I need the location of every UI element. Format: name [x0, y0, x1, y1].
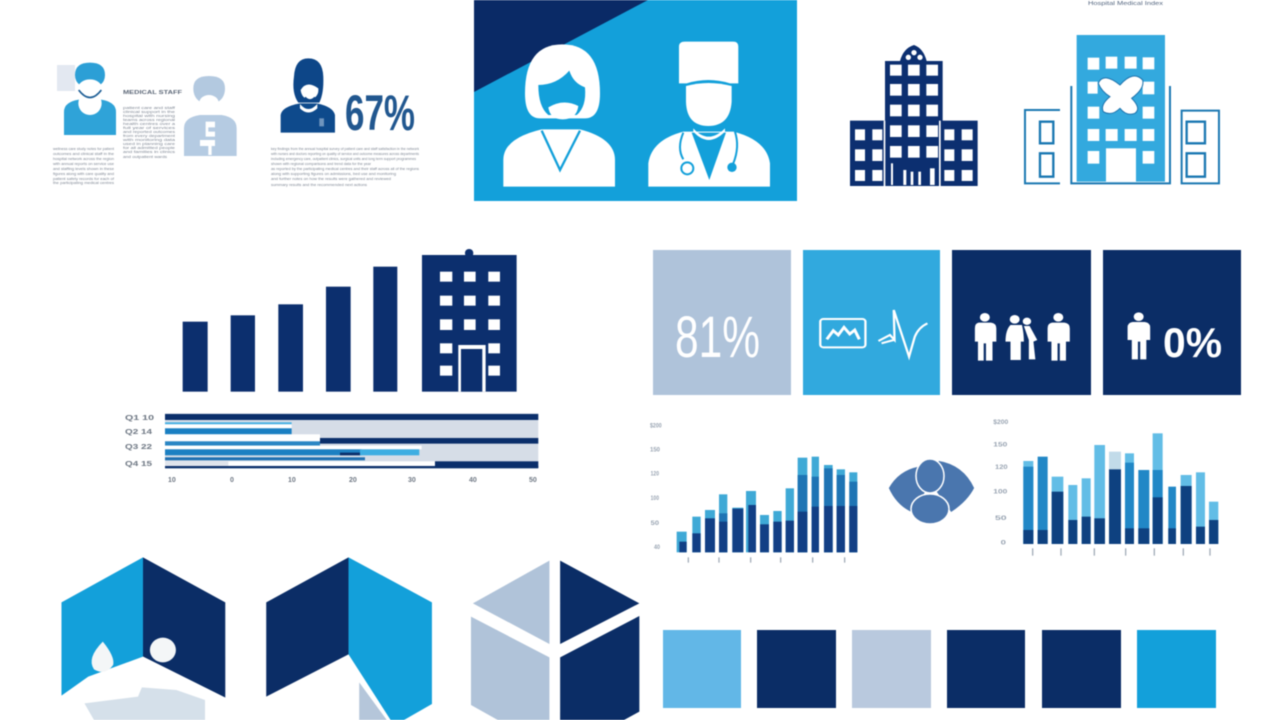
text block: middle paragraph: and reported outcomes [123, 129, 175, 134]
bar chart: left stacked columns: 150 [650, 446, 660, 453]
caption: top right tiny text: Hospital Medical Index [1088, 1, 1164, 7]
axis labels: horizontal bar scale: 40 [469, 477, 477, 484]
panel: 81 percent tile: 81% [675, 305, 760, 370]
icon: light blue clinician [184, 76, 237, 156]
bar chart: left stacked columns [650, 422, 857, 563]
icon: pulse star [878, 310, 927, 357]
axis labels: horizontal bar scale: 10 [168, 477, 176, 484]
axis labels: horizontal bar categories: Q3 22 [125, 444, 152, 451]
text block: left paragraph: hospital network across the region [53, 156, 114, 161]
text block: left paragraph: figures along with care quality and [53, 171, 114, 176]
icon: sky blue hospital with cross [1025, 35, 1219, 183]
text block: left paragraph: patient safety records for each of [53, 176, 115, 181]
text block: right paragraph: summary results and the recommended next actions [271, 182, 367, 187]
text block: right paragraph: shown with regional comparisons and trend data for the year [271, 161, 372, 166]
bar chart: right stacked columns: $200 [993, 419, 1009, 426]
series: dark base [679, 505, 857, 552]
heading: small section title: MEDICAL STAFF [123, 90, 183, 96]
panel: people group tile [952, 250, 1091, 395]
icon: navy nurse [281, 58, 335, 133]
text block: left paragraph: and staffing levels shown in these [53, 166, 115, 171]
text block: middle paragraph: clinical support in the [123, 109, 176, 114]
text block: left paragraph: with annual reports on service use [53, 161, 115, 166]
icon: hexagon with patients [61, 557, 225, 720]
person card: heading and paragraph with light clinician [123, 76, 237, 159]
bar chart: left stacked columns: 50 [651, 520, 659, 527]
text block: left paragraph: outcomes and clinical staff in the [53, 151, 115, 156]
text block: middle paragraph: full year of services [123, 125, 175, 130]
icon: man left [975, 313, 996, 361]
icon: navy hospital building [850, 45, 978, 186]
text block: middle paragraph: teams across regional [123, 117, 175, 122]
text block: middle paragraph: and families in clinics [123, 149, 175, 154]
panel: 81 percent tile [653, 250, 791, 395]
panel: 0 percent tile [1103, 250, 1241, 395]
panel: monitor and pulse tile [803, 250, 940, 395]
text block: right paragraph: including emergency care, outpatient clinics, surgical units and long term support programmes [271, 156, 416, 161]
legend: colour swatches [663, 630, 1216, 708]
axis labels: horizontal bar categories: Q1 10 [125, 415, 154, 422]
text block: middle paragraph: health centres over a [123, 121, 176, 126]
icon: navy tower at end of columns [422, 249, 517, 392]
panel: 0 percent tile: 0% [1163, 319, 1222, 366]
icon: monitor [820, 319, 865, 347]
text block: left paragraph: the participating medical centres [53, 180, 114, 185]
bar chart: left stacked columns: 100 [651, 495, 659, 502]
icon: blue clinician [64, 63, 116, 135]
icon: hexagon navy and sky [266, 557, 432, 720]
text block: middle paragraph: and outpatient wards [123, 154, 167, 159]
bar chart: right stacked columns: 120 [995, 464, 1008, 471]
series: light tops [677, 457, 857, 552]
series: light tops [1023, 433, 1218, 544]
bar chart: left stacked columns: $200 [650, 422, 662, 429]
axis labels: horizontal bar scale: 0 [230, 477, 234, 484]
text block: right paragraph: and further notes on how the results were gathered and reviewed [271, 176, 391, 181]
icon: couple [1006, 315, 1037, 360]
icon: single man [1128, 312, 1150, 359]
text block: middle paragraph: patient care and staff [123, 105, 176, 110]
text block: middle paragraph: with monitoring data [123, 137, 176, 142]
icon: central blue organ shape [888, 459, 975, 524]
panel: hero doctors on blue [474, 0, 797, 201]
axis labels: horizontal bar scale [168, 477, 537, 484]
bar chart: horizontal stacked bars [165, 413, 538, 468]
axis labels: horizontal bar scale: 10 [288, 477, 296, 484]
text block: middle paragraph [123, 105, 176, 159]
bar chart: right stacked columns [993, 419, 1218, 556]
text block: left paragraph: wellness care study notes for patient [53, 146, 115, 151]
icon: male doctor [648, 42, 770, 187]
series: dark base [1023, 469, 1218, 544]
text block: middle paragraph: used in planning care [123, 141, 176, 146]
axis labels: horizontal bar scale: 20 [349, 477, 357, 484]
axis labels: horizontal bar scale: 50 [529, 477, 537, 484]
bar chart: left stacked columns: 120 [651, 471, 659, 478]
text block: middle paragraph: hospital with nursing [123, 113, 175, 118]
bar chart: right stacked columns: 150 [993, 442, 1008, 449]
icon: female nurse [503, 44, 615, 187]
stat card: 67 percent [271, 58, 419, 187]
text block: right paragraph: as reported by the participating medical centres and their staff across all of the regions [271, 166, 419, 171]
text block: right paragraph [271, 146, 419, 187]
text block: right paragraph: key findings from the annual hospital survey of patient care and staff satisfaction in the network [271, 146, 419, 151]
bar chart: rising navy columns with building [183, 249, 517, 392]
stat: 67%: 67% [345, 85, 415, 141]
axis labels: horizontal bar scale: 30 [408, 477, 416, 484]
series: mid blue [1023, 457, 1176, 544]
text block: middle paragraph: from every department [123, 133, 176, 138]
axis labels: horizontal bar categories [125, 415, 154, 468]
text block: right paragraph: along with supporting figures on admissions, bed use and monitoring [271, 171, 396, 176]
bar chart: left stacked columns: 40 [654, 544, 660, 551]
icon: man right [1048, 313, 1070, 361]
axis labels: horizontal bar categories: Q4 15 [125, 461, 152, 468]
icon: segmented cube [471, 561, 639, 720]
person card: blue masked clinician [53, 63, 116, 185]
text block: left paragraph [53, 146, 115, 185]
axis labels: horizontal bar categories: Q2 14 [125, 429, 152, 436]
text block: middle paragraph: for all admitted people [123, 145, 176, 150]
bar chart: right stacked columns: 0 [1001, 540, 1006, 547]
text block: right paragraph: with nurses and doctors reporting on quality of service and outcome measures across departments [271, 151, 419, 156]
series: mid blue [719, 468, 857, 552]
bar chart: right stacked columns: 100 [993, 488, 1008, 495]
bar chart: right stacked columns: 50 [995, 515, 1007, 522]
